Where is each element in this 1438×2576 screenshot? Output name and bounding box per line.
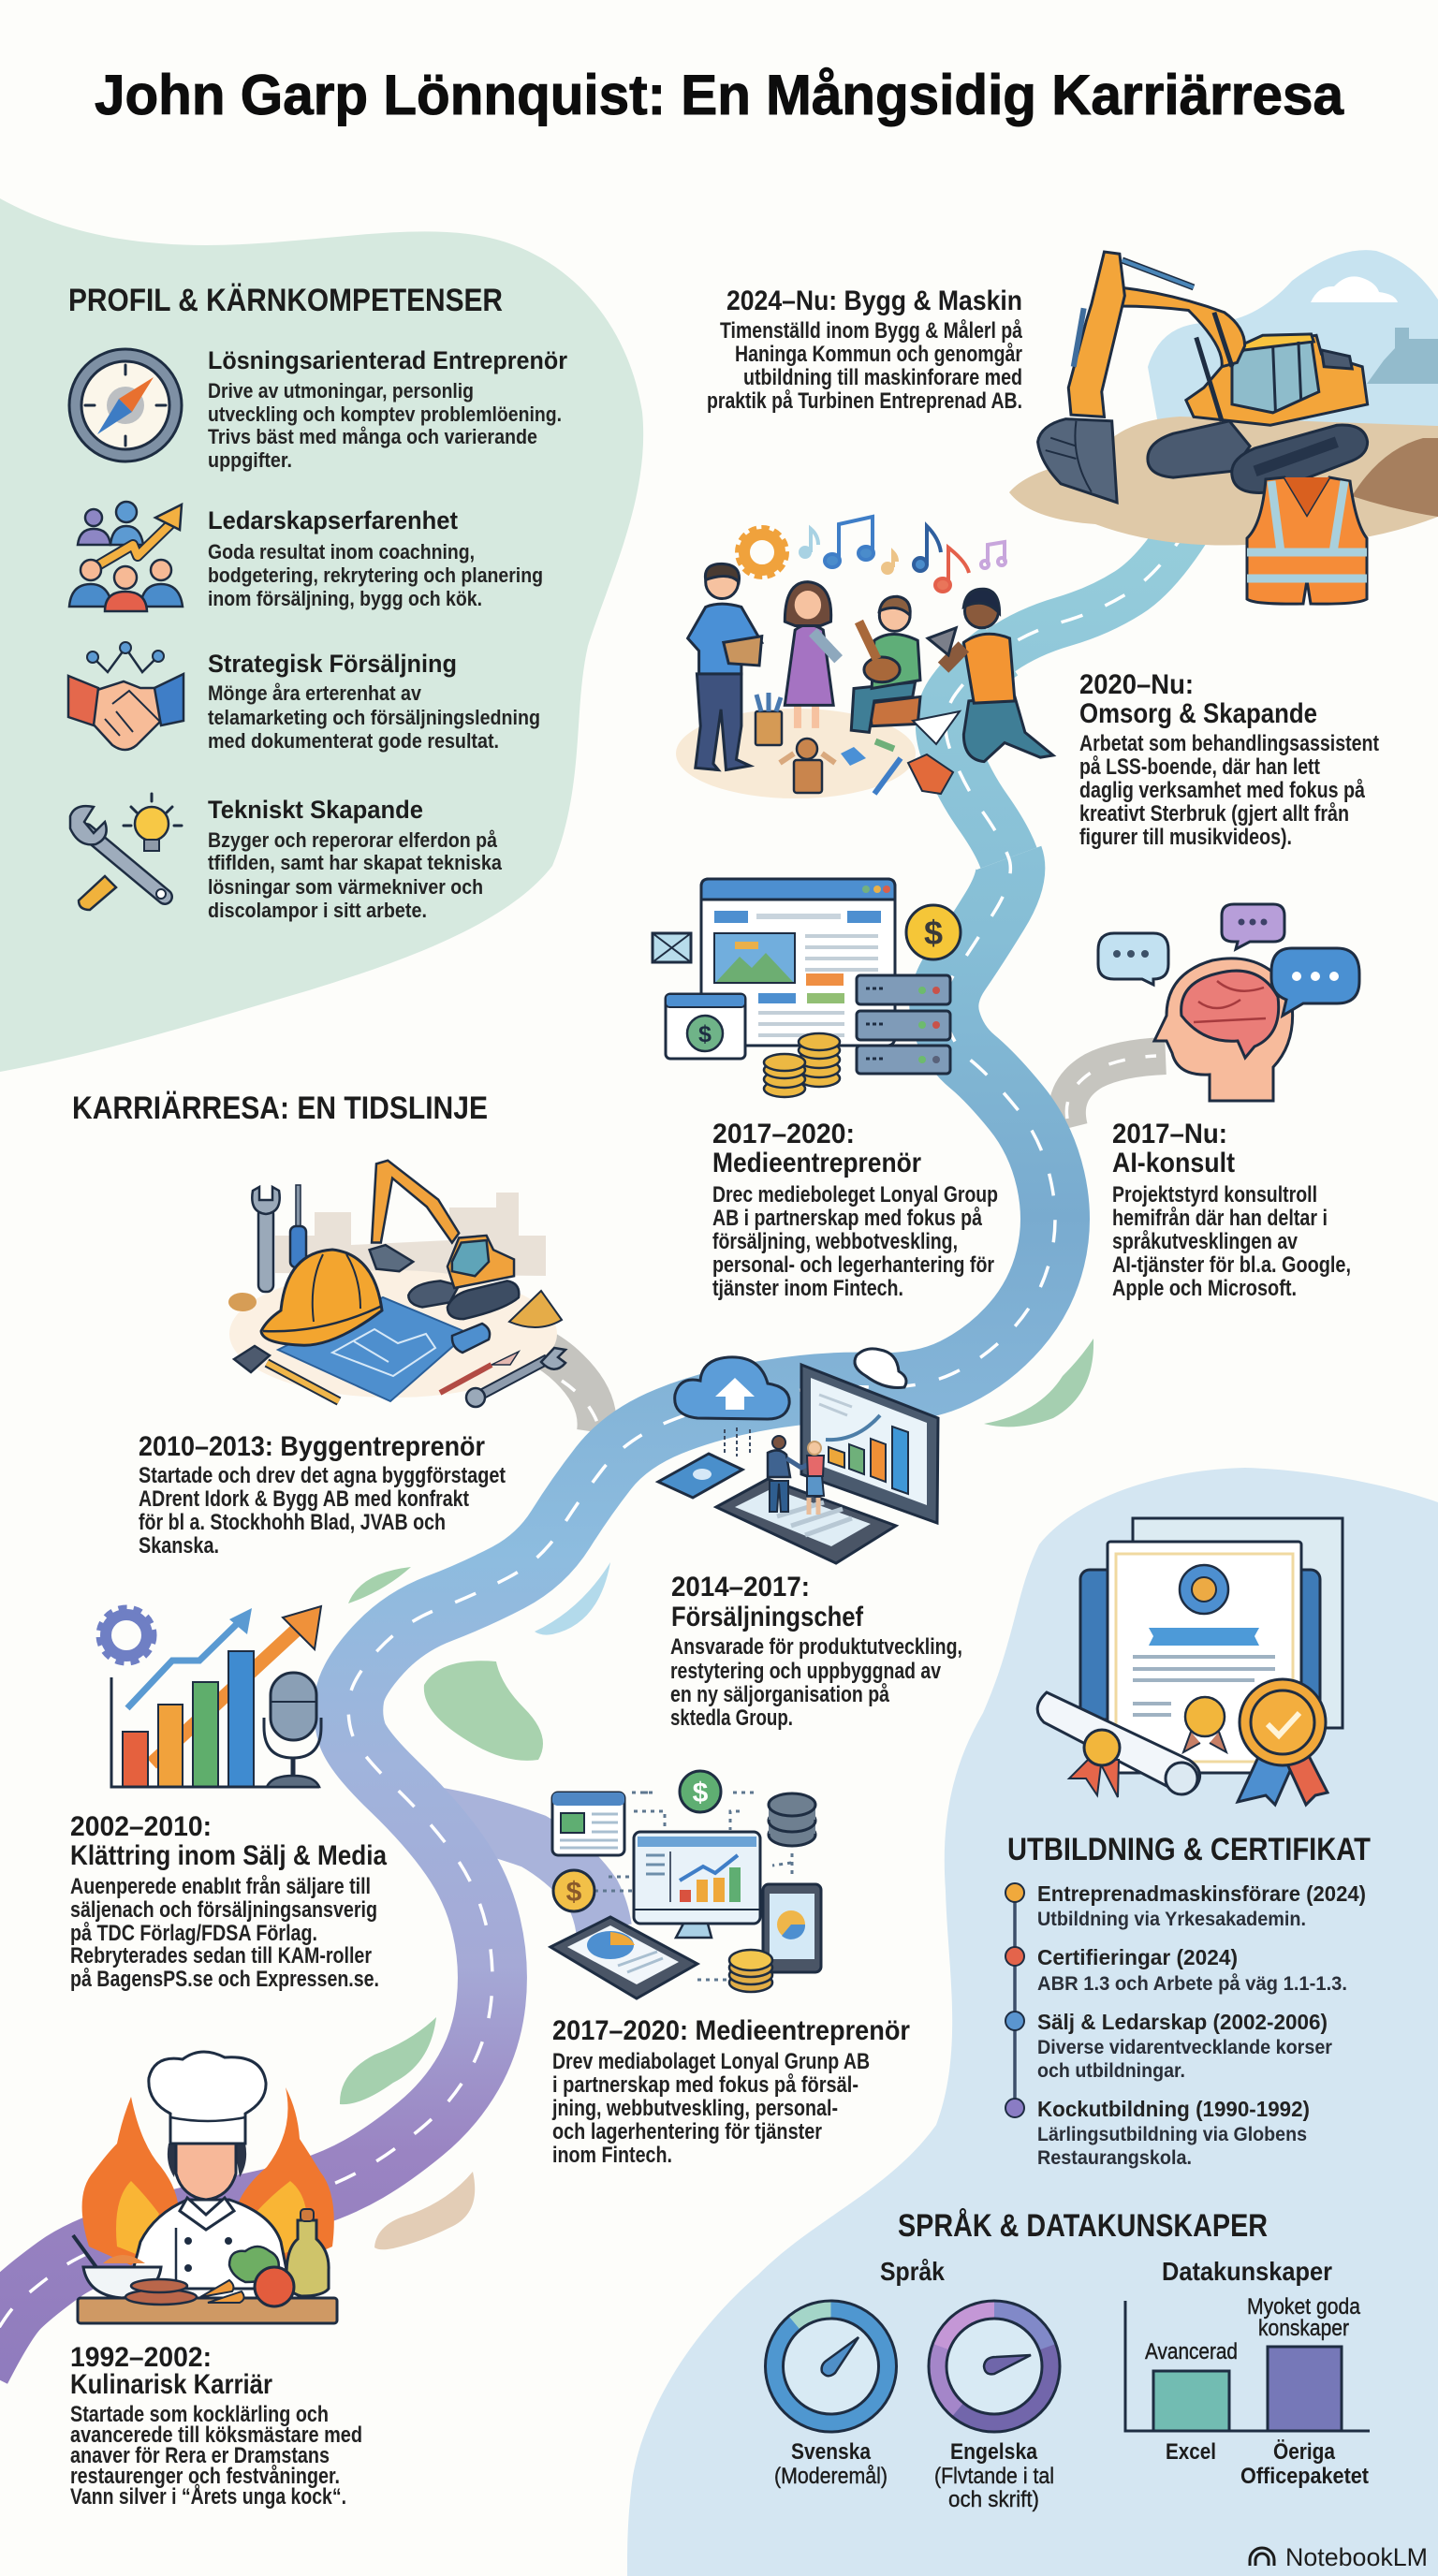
event: 2017 media entrepreneur second: Drev mediabolaget Lonyal Grunp AB — [552, 2049, 870, 2074]
event: 2017 media entrepreneur: personal- och legerhantering för — [712, 1252, 994, 1278]
logo: NotebookLM: NotebookLM — [1285, 2543, 1428, 2571]
competence: sales: telamarketing och försäljningsledning — [208, 706, 540, 729]
icon: hard hat — [261, 1250, 382, 1345]
event: 2017 AI consultant: språkutvesklingen av — [1112, 1229, 1299, 1254]
event: 2002 sales and media: på TDC Förlag/FDSA Förlag. — [70, 1921, 317, 1946]
education item: sales and leadership: och utbildningar. — [1037, 2060, 1185, 2082]
icon: flames — [82, 2087, 334, 2265]
icon: knife and spanner — [440, 1348, 565, 1407]
icon: bowl — [73, 2235, 161, 2298]
icon: dollar coin: $ — [693, 1778, 709, 1808]
event: 1992 culinary career: Kulinarisk Karriär — [70, 2369, 272, 2400]
subheading: languages: Språk — [880, 2257, 945, 2286]
chef face — [176, 2144, 236, 2200]
icon: meat — [125, 2279, 197, 2305]
heading: education: UTBILDNING & CERTIFIKAT — [1007, 1832, 1371, 1867]
event: 2024 construction and machines: 2024–Nu: Bygg & Maskin — [726, 285, 1022, 316]
icon: isometric tablet — [550, 1917, 697, 1998]
event: 1992 culinary career: Startade som kocklärling och — [70, 2402, 329, 2427]
icon: award rosette — [1238, 1679, 1328, 1805]
icon: blueprint — [278, 1297, 490, 1401]
icon: compass — [69, 349, 182, 461]
icon: gold dollar coin: $ — [566, 1877, 582, 1908]
illustration: web media and servers — [653, 879, 961, 1097]
event: 2020 care and creating: Arbetat som behandlingsassistent — [1079, 731, 1379, 756]
competence: entrepreneur: Lösningsarienterad Entreprenör — [208, 346, 567, 374]
illustration: bar chart with microphone — [99, 1606, 321, 1787]
icon: tablet base — [716, 1479, 896, 1563]
career road — [0, 520, 1191, 2368]
icon: browser window — [552, 1793, 624, 1855]
icon: diploma scroll — [1037, 1692, 1200, 1797]
education timeline line and dots — [1005, 1883, 1024, 2117]
branch road: construction — [495, 1333, 597, 1432]
bar chart: computer skills: konskaper — [1258, 2316, 1349, 2341]
icon: small excavator — [370, 1161, 519, 1319]
icon: monitor with chart — [801, 1365, 938, 1523]
event: 1992 culinary career — [70, 2342, 362, 2510]
bar chart: computer skills — [1125, 2294, 1370, 2489]
bar chart: computer skills: Officepaketet — [1240, 2464, 1369, 2489]
branch road: AI consultant — [1067, 1056, 1166, 1128]
event: 2010 builder — [139, 1431, 506, 1559]
event: 2017 media entrepreneur: 2017–2020: — [712, 1119, 855, 1149]
event: 2017 media entrepreneur second: jning, webbutveskling, personal- — [551, 2096, 838, 2121]
gauge: Swedish: Svenska — [791, 2439, 872, 2465]
event: 2017 media entrepreneur second: och lagerhentering för tjänster — [552, 2119, 822, 2144]
education item: chef training: Restaurangskola. — [1037, 2147, 1192, 2169]
competence: sales — [68, 642, 540, 753]
chef hat — [149, 2052, 266, 2144]
event: 2010 builder: ADrent Idork & Bygg AB med konfrakt — [139, 1486, 469, 1512]
icon: tomato — [255, 2267, 294, 2306]
panel: education and certificates — [1005, 1832, 1371, 2169]
illustration: devices and data flow — [550, 1771, 821, 1998]
panel: profile and core competences — [68, 283, 567, 922]
event: 2017 media entrepreneur: AB i partnerskap med fokus på — [712, 1206, 983, 1231]
event: 2017 AI consultant: AI-tjänster för bl.a. Google, — [1112, 1252, 1351, 1278]
event: 2017 media entrepreneur second: i partnerskap med fokus på försäl- — [552, 2072, 858, 2098]
event: 2024 construction and machines: Haninga Kommun och genomgår — [735, 342, 1022, 367]
event: 2024 construction and machines: praktik på Turbinen Entreprenad AB. — [707, 388, 1022, 414]
heading: languages and computer skills: SPRÅK & DATAKUNSKAPER — [898, 2208, 1268, 2244]
event: 2010 builder: 2010–2013: Byggentreprenör — [139, 1431, 485, 1462]
bar chart: computer skills: Öeriga — [1273, 2439, 1336, 2465]
competence: sales: med dokumenterat gode resultat. — [208, 729, 499, 753]
event: 1992 culinary career: Vann silver i “Årets unga kock“. — [70, 2483, 346, 2510]
people group — [688, 564, 1053, 770]
event: 1992 culinary career: anaver för Rera er Dramstans — [70, 2443, 330, 2468]
subheading: computer skills: Datakunskaper — [1162, 2257, 1332, 2286]
bar: Excel — [1153, 2371, 1229, 2431]
icon: small payment window — [666, 994, 745, 1059]
event: 2002 sales and media: 2002–2010: — [70, 1811, 212, 1842]
event: 2017 AI consultant — [1112, 1119, 1351, 1301]
icon: safety vest — [1247, 477, 1367, 604]
event: 2017 media entrepreneur second: inom Fintech. — [552, 2143, 672, 2168]
event: 2020 care and creating: daglig verksamhet med fokus på — [1079, 778, 1366, 803]
competence: entrepreneur: utveckling och komptev problemlöening. — [208, 402, 562, 426]
event: 2002 sales and media: Rebryterades sedan till KAM-roller — [70, 1943, 372, 1969]
education item: machine operator — [1037, 1881, 1366, 1930]
title: John Garp Lönnquist: En Mångsidig Karriärresa — [95, 64, 1344, 126]
event: 2010 builder: för bl a. Stockhohh Blad, JVAB och — [139, 1510, 446, 1535]
education item: certifications: Certifieringar (2024) — [1037, 1945, 1238, 1969]
person: kneeling with craft — [928, 589, 1053, 762]
person: man with bag — [688, 564, 762, 770]
icon: database — [769, 1793, 815, 1846]
speech bubble: blue — [1271, 948, 1359, 1016]
icon: carrots — [200, 2280, 244, 2303]
competence: leadership: bodgetering, rekrytering och planering — [208, 564, 543, 587]
event: 2010 builder: Skanska. — [139, 1533, 219, 1559]
icon: gold coin: $ — [924, 914, 943, 952]
event: 2017 media entrepreneur: Drec medieboleget Lonyal Group — [712, 1182, 998, 1208]
panel: languages and computer skills — [766, 2208, 1370, 2512]
bar chart: computer skills: Excel — [1166, 2439, 1216, 2465]
education item: sales and leadership: Diverse vidarentvecklande korser — [1037, 2037, 1332, 2058]
event: 2020 care and creating: på LSS-boende, där han lett — [1079, 754, 1320, 780]
event: 2017 AI consultant: Projektstyrd konsultroll — [1112, 1182, 1317, 1208]
competence: sales: Mönge åra erterenhat av — [208, 681, 422, 705]
competence: entrepreneur — [69, 346, 567, 472]
event: 2017 AI consultant: Apple och Microsoft. — [1112, 1276, 1297, 1301]
icon: broccoli — [229, 2247, 279, 2282]
education item: chef training: Kockutbildning (1990-1992) — [1037, 2097, 1310, 2121]
icon: envelope — [653, 933, 691, 962]
event: 2014 sales manager: sktedla Group. — [670, 1705, 793, 1731]
icon: server stack — [857, 975, 950, 1074]
competence: sales: Strategisk Försäljning — [208, 650, 457, 678]
branch road: media entrepreneur — [412, 1811, 604, 1928]
illustration: construction tools and excavator — [228, 1161, 565, 1407]
competence: technical: Bzyger och reperorar elferdon på — [208, 828, 498, 852]
icon: small payment window: $ — [698, 1021, 712, 1047]
event: 2017 media entrepreneur second: 2017–2020: Medieentreprenör — [552, 2015, 910, 2046]
illustration: cloud, screen and handshake — [658, 1349, 938, 1563]
education item: machine operator: Entreprenadmaskinsförare (2024) — [1037, 1881, 1366, 1906]
speech bubble: purple — [1222, 904, 1284, 949]
gauge: English — [929, 2301, 1060, 2512]
icon: wrench — [252, 1187, 280, 1292]
person: girl in purple dress — [785, 582, 839, 728]
panel background: profile — [0, 198, 643, 1072]
illustration: creative group with music — [676, 517, 1053, 798]
event: 2020 care and creating: 2020–Nu: — [1079, 669, 1194, 700]
competence: entrepreneur: Trivs bäst med många och varierande — [208, 425, 537, 448]
event: 2014 sales manager: Ansvarade för produktutveckling, — [670, 1634, 962, 1660]
event: 2024 construction and machines: Timenställd inom Bygg & Målerl på — [720, 318, 1023, 344]
icon: rocks — [228, 1291, 562, 1327]
competence: entrepreneur: uppgifter. — [208, 448, 292, 472]
decorative landscape blobs — [340, 1339, 1093, 2249]
icon: wrench, bulb and tool — [70, 794, 182, 910]
event: 1992 culinary career: avancerede till köksmästare med — [70, 2422, 362, 2448]
icon: upload cloud — [675, 1357, 789, 1456]
icon: phone with pie chart — [763, 1884, 821, 1972]
gauge: English: och skrift) — [948, 2487, 1039, 2512]
education item: sales and leadership: Sälj & Ledarskap (2002-2006) — [1037, 2010, 1328, 2034]
event: 2017 media entrepreneur: tjänster inom Fintech. — [712, 1276, 903, 1301]
icon: monitor — [634, 1832, 760, 1938]
event: 2017 media entrepreneur second — [551, 2015, 910, 2168]
education item: sales and leadership — [1037, 2010, 1332, 2082]
education item: chef training: Lärlingsutbildning via Globens — [1037, 2124, 1307, 2145]
icon: gear — [739, 529, 785, 576]
event: 2014 sales manager: Försäljningschef — [671, 1602, 864, 1632]
excavator machine — [1038, 252, 1368, 503]
branch dashes — [562, 1056, 1156, 1427]
education item: certifications: ABR 1.3 och Arbete på väg 1.1-1.3. — [1037, 1973, 1347, 1995]
event: 2017 media entrepreneur: försäljning, webbotveskling, — [712, 1229, 958, 1254]
event: 2017 media entrepreneur — [712, 1119, 998, 1301]
main road — [0, 520, 1191, 2368]
bar chart: computer skills: Avancerad — [1145, 2339, 1238, 2364]
competence: leadership: Ledarskapserfarenhet — [208, 506, 458, 534]
cutting board — [78, 2298, 337, 2323]
event: 2002 sales and media: säljenach och försäljningsansverig — [70, 1897, 377, 1923]
event: 2020 care and creating: Omsorg & Skapande — [1079, 698, 1317, 729]
event: 2014 sales manager: en ny säljorganisation på — [670, 1682, 890, 1707]
panel background: education and skills — [627, 1468, 1438, 2576]
browser window — [701, 879, 895, 1046]
bar chart: computer skills: Myoket goda — [1247, 2294, 1361, 2320]
event: 2010 builder: Startade och drev det agna byggförstaget — [139, 1463, 506, 1488]
gauge: English: (Flvtande i tal — [934, 2464, 1054, 2489]
event: 2017 AI consultant: 2017–Nu: — [1112, 1119, 1227, 1149]
event: 2002 sales and media: Auenperede enablıt från säljare till — [70, 1874, 371, 1899]
event: 2024 construction and machines — [707, 285, 1023, 414]
event: 2014 sales manager — [670, 1572, 962, 1731]
icon: gold dollar coin — [553, 1870, 594, 1911]
icon: small medal — [1183, 1697, 1226, 1752]
icon: hammer — [234, 1346, 339, 1401]
event: 2017 AI consultant: hemifrån där han deltar i — [1112, 1206, 1328, 1231]
education item: certifications — [1037, 1945, 1347, 1995]
people shaking hands — [768, 1436, 824, 1515]
event: 2020 care and creating: figurer till musikvideos). — [1079, 825, 1292, 850]
gauge: Swedish: (Moderemål) — [774, 2464, 888, 2489]
chef jacket — [128, 2200, 290, 2289]
icon: team with rising arrow — [69, 502, 183, 611]
event: 2020 care and creating: kreativt Sterbruk (gjert allt från — [1079, 801, 1349, 827]
event: 1992 culinary career: restaurenger och festvåninger. — [70, 2464, 340, 2489]
icon: coin stack — [729, 1950, 772, 1992]
illustration: large excavator scene — [1009, 250, 1438, 604]
icon: dollar coin — [680, 1771, 721, 1812]
heading: profile: PROFIL & KÄRNKOMPETENSER — [68, 283, 503, 318]
gauge: English: Engelska — [950, 2439, 1038, 2465]
event: 2014 sales manager: restytering och uppbyggnad av — [670, 1659, 942, 1684]
event: 2002 sales and media: på BagensPS.se och Expressen.se. — [70, 1967, 379, 1992]
person: seated with guitar — [851, 596, 920, 732]
craft materials — [756, 693, 960, 794]
event: 2002 sales and media — [70, 1811, 387, 1992]
icon: oil bottle — [286, 2209, 329, 2296]
competence: technical — [70, 794, 503, 922]
speech bubble: light blue — [1098, 933, 1168, 985]
competence: entrepreneur: Drive av utmoningar, personlig — [208, 379, 474, 402]
event: 2002 sales and media: Klättring inom Sälj & Media — [70, 1840, 387, 1871]
competence: leadership: Goda resultat inom coachning, — [208, 540, 475, 564]
illustration: certificates and awards — [1037, 1518, 1343, 1805]
bar: Office — [1268, 2347, 1342, 2431]
icon: gear — [99, 1608, 154, 1662]
heading: timeline: KARRIÄRRESA: EN TIDSLINJE — [72, 1090, 488, 1126]
icon: microphone — [264, 1673, 321, 1787]
icon: gold coin — [906, 905, 961, 959]
competence: technical: lösningar som värmekniver och — [208, 875, 483, 899]
event: 2024 construction and machines: utbildning till maskinforare med — [743, 365, 1022, 390]
event: 2020 care and creating — [1079, 669, 1379, 850]
event: 2017 AI consultant: AI-konsult — [1112, 1148, 1235, 1178]
icon: phone — [658, 1454, 742, 1498]
icon: white cloud — [855, 1349, 906, 1387]
illustration: head with brain and speech bubbles — [1098, 904, 1359, 1101]
icon: coin stacks — [764, 1033, 840, 1097]
competence: technical: tfiflden, samt har skapat tekniska — [208, 851, 503, 874]
competence: technical: Tekniskt Skapande — [208, 796, 423, 824]
competence: leadership — [69, 502, 543, 611]
education item: chef training — [1037, 2097, 1310, 2169]
education item: machine operator: Utbildning via Yrkesakademin. — [1037, 1909, 1306, 1930]
icon: top seal — [1180, 1565, 1228, 1614]
icon: handshake — [68, 642, 183, 750]
event: 1992 culinary career: 1992–2002: — [70, 2342, 212, 2373]
competence: leadership: inom försäljning, bygg och kök. — [208, 587, 482, 610]
icon: music notes — [800, 517, 1005, 592]
event: 2014 sales manager: 2014–2017: — [671, 1572, 810, 1603]
chef hair — [168, 2144, 246, 2177]
gauge: Swedish — [766, 2301, 897, 2489]
competence: technical: discolampor i sitt arbete. — [208, 899, 427, 922]
road centre dashes — [0, 529, 1187, 2368]
event: 2017 media entrepreneur: Medieentreprenör — [712, 1148, 921, 1178]
illustration: chef with flames and food — [73, 2052, 337, 2323]
icon: screwdriver — [290, 1185, 306, 1267]
